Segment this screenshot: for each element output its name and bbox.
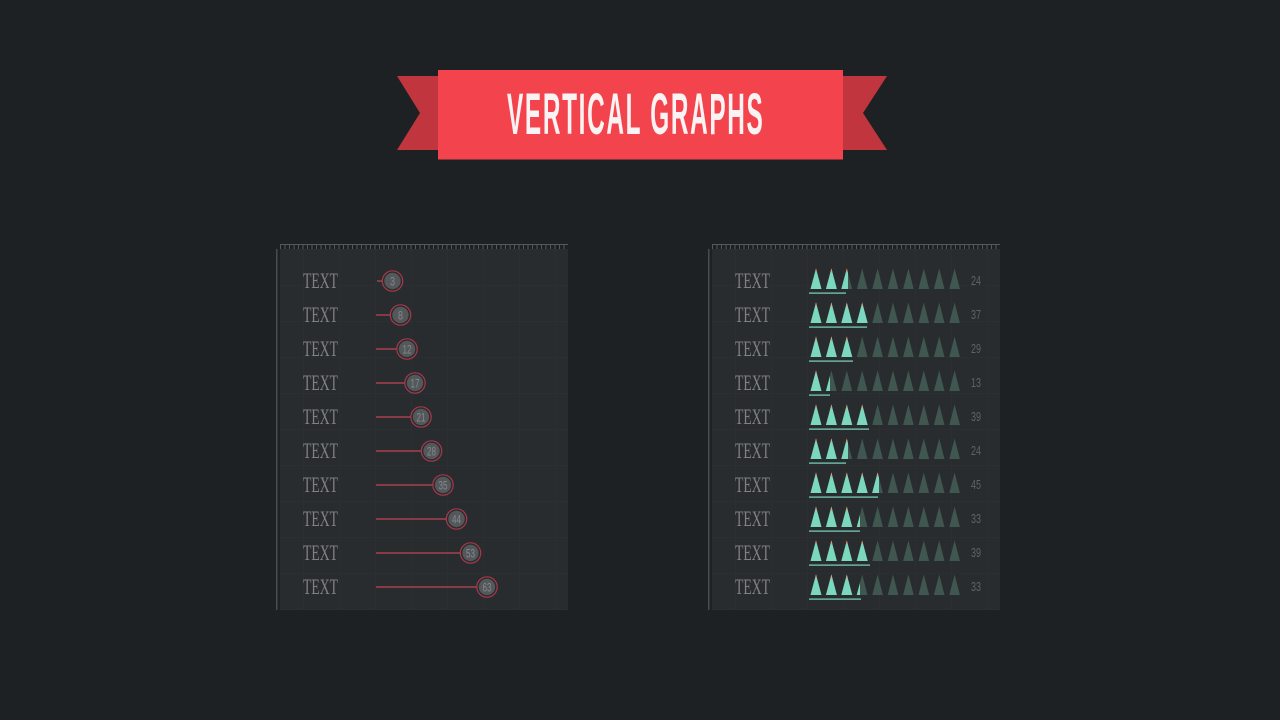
row 9: TEXT	[303, 540, 338, 565]
row 3	[735, 336, 981, 362]
row 3: TEXT	[303, 336, 338, 361]
row 6	[735, 438, 981, 464]
row 3: 29	[971, 341, 981, 356]
row 2	[303, 302, 411, 327]
row 5	[303, 404, 431, 429]
top ruler	[280, 244, 568, 247]
row 10: TEXT	[735, 574, 770, 599]
row 1: 3	[390, 274, 395, 288]
row 8	[735, 506, 981, 532]
title ribbon	[397, 70, 887, 160]
row 8: 33	[971, 511, 981, 526]
row 1: 24	[971, 273, 981, 288]
row 5: 21	[416, 410, 426, 424]
row 7: TEXT	[735, 472, 770, 497]
row 2: 8	[398, 308, 403, 322]
left axis	[276, 249, 278, 610]
row 4: 13	[971, 375, 981, 390]
panel: lollipop chart	[276, 244, 568, 610]
row 9	[735, 540, 981, 566]
row 8: TEXT	[303, 506, 338, 531]
ribbon left tail	[397, 76, 438, 150]
row 7	[735, 472, 981, 498]
row 5: TEXT	[303, 404, 338, 429]
row 6: 24	[971, 443, 981, 458]
row 3: 12	[402, 342, 412, 356]
row 7: TEXT	[303, 472, 338, 497]
row 7: 45	[971, 477, 981, 492]
row 9: TEXT	[735, 540, 770, 565]
row 1	[303, 268, 403, 293]
row 4: TEXT	[735, 370, 770, 395]
row 5: 39	[971, 409, 981, 424]
ribbon right tail	[843, 76, 887, 150]
row 7: 35	[438, 478, 448, 492]
row 2: 37	[971, 307, 981, 322]
row 2	[735, 302, 981, 328]
row 8: 44	[452, 512, 461, 526]
panel: tree pictogram chart	[708, 244, 1000, 610]
row 10: TEXT	[303, 574, 338, 599]
row 7	[303, 472, 453, 497]
row 9: 53	[466, 546, 475, 560]
ribbon band	[438, 70, 843, 160]
row 1	[735, 268, 981, 294]
row 4: TEXT	[303, 370, 338, 395]
row 4	[303, 370, 425, 395]
row 9: 39	[971, 545, 981, 560]
row 3	[303, 336, 417, 361]
row 6: 28	[427, 444, 436, 458]
left axis	[708, 249, 710, 610]
row 1: TEXT	[303, 268, 338, 293]
row 8: TEXT	[735, 506, 770, 531]
row 4: 17	[410, 376, 420, 390]
row 10	[303, 574, 497, 599]
row 4	[735, 370, 981, 396]
row 9	[303, 540, 481, 565]
row 10: 33	[971, 579, 981, 594]
row 8	[303, 506, 467, 531]
panel background	[280, 249, 568, 610]
row 6: TEXT	[735, 438, 770, 463]
row 2: TEXT	[735, 302, 770, 327]
row 5	[735, 404, 981, 430]
title: VERTICAL GRAPHS	[507, 83, 764, 147]
row 3: TEXT	[735, 336, 770, 361]
row 10: 63	[482, 580, 492, 594]
row 5: TEXT	[735, 404, 770, 429]
row 10	[735, 574, 981, 600]
row 6	[303, 438, 442, 463]
panel background	[712, 249, 1000, 610]
row 2: TEXT	[303, 302, 338, 327]
row 6: TEXT	[303, 438, 338, 463]
row 1: TEXT	[735, 268, 770, 293]
top ruler	[712, 244, 1000, 247]
